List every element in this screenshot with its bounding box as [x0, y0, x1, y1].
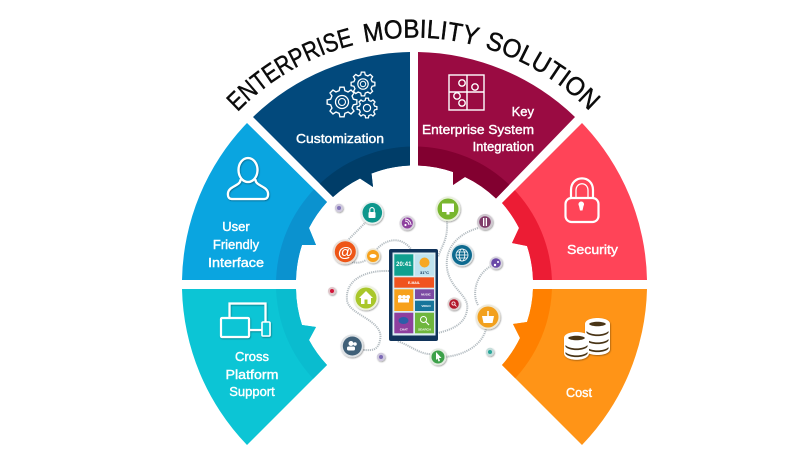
icon: search bubble	[448, 298, 460, 310]
label: key enterprise system integration: Enterprise System	[422, 122, 534, 137]
central mobile app illustration	[328, 196, 502, 366]
icon: rss bubble	[400, 216, 414, 230]
panel: cross platform support	[182, 289, 327, 445]
icon: devices	[221, 304, 270, 337]
panel: cost	[502, 289, 647, 445]
icon: coin stacks	[564, 318, 610, 360]
label: user friendly interface	[208, 219, 264, 270]
panel: user friendly interface	[182, 123, 327, 280]
icon: basket bubble	[476, 304, 500, 330]
label: cost: Cost	[566, 385, 592, 400]
icon bubbles	[328, 196, 502, 366]
label: user friendly interface: Interface	[208, 255, 264, 270]
label: key enterprise system integration: Key	[512, 104, 534, 119]
panel: customization	[253, 52, 410, 197]
icon: user	[228, 158, 268, 199]
phone: SEARCH	[418, 328, 431, 332]
icon: globe bubble	[450, 244, 474, 266]
phone: MUSIC	[421, 292, 432, 296]
label: user friendly interface: User	[222, 219, 250, 234]
label: key enterprise system integration: Integration	[473, 139, 534, 154]
label: user friendly interface: Friendly	[213, 237, 260, 252]
label: cross platform support: Support	[229, 384, 275, 399]
small dots	[328, 204, 494, 361]
phone: 20:41	[396, 262, 412, 268]
title: MOBILITY	[364, 19, 481, 44]
icon: lock bubble	[360, 202, 384, 224]
icon: at sign bubble	[332, 240, 358, 264]
icon: contact bubble	[340, 334, 364, 358]
icon: puzzle	[449, 75, 484, 110]
phone: VIDEO	[421, 304, 431, 308]
connector lines	[347, 221, 491, 357]
label: cross platform support: Cross	[235, 349, 269, 364]
icon: gears	[327, 72, 377, 118]
icon: monitor bubble	[436, 196, 460, 222]
icon: cursor bubble	[430, 348, 446, 366]
icon: pause bubble	[477, 214, 493, 230]
phone: E-MAIL	[408, 281, 421, 285]
label: cross platform support: Platform	[226, 367, 278, 382]
label: security: Security	[567, 242, 619, 257]
title: SOLUTION	[486, 32, 601, 110]
title: ENTERPRISE	[226, 28, 354, 112]
icon: house bubble	[354, 286, 378, 310]
panel: key enterprise system integration	[418, 52, 575, 198]
label: customization: Customization	[296, 131, 384, 146]
label: cross platform support	[226, 349, 278, 399]
icon: at sign bubble: @	[338, 244, 353, 261]
icon: padlock	[566, 178, 598, 222]
icon: music bubble	[490, 256, 502, 270]
panel: security	[502, 123, 647, 280]
phone	[389, 249, 438, 341]
label: key enterprise system integration	[422, 104, 534, 154]
title	[226, 19, 601, 112]
phone: 31°C	[420, 270, 429, 275]
phone: CHAT	[400, 328, 408, 332]
icon: fish bubble	[366, 248, 380, 264]
